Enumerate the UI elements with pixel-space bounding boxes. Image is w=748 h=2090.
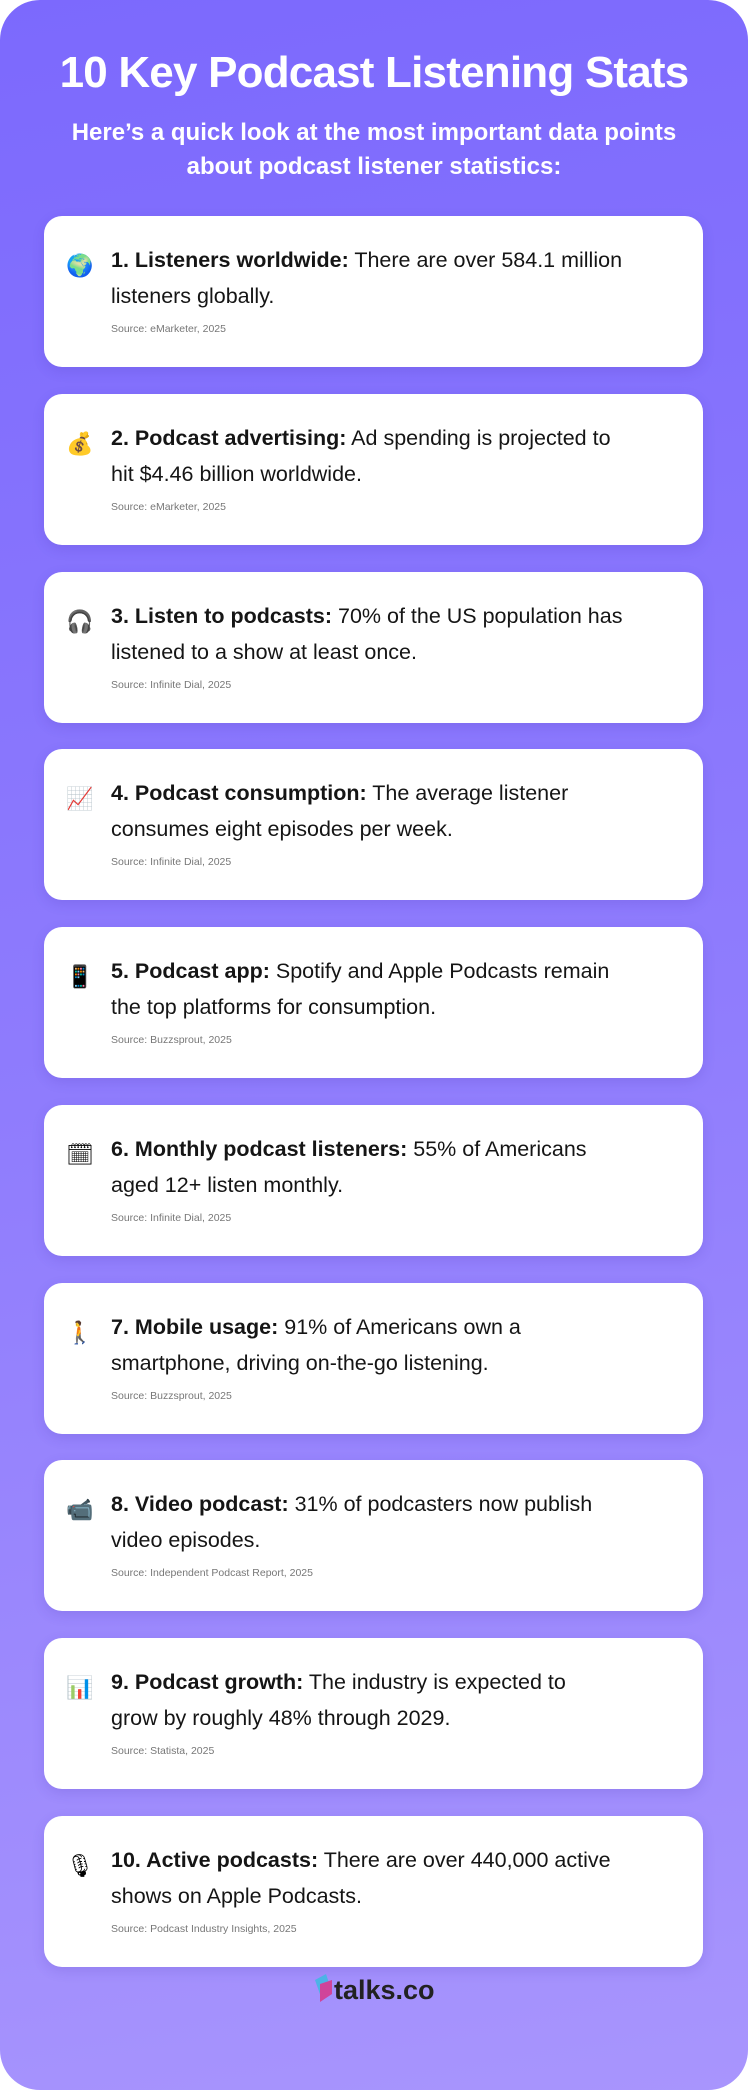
card 10: 10. Active podcasts: There are over 440,000 active xyxy=(111,1848,611,1872)
card 2: 2. Podcast advertising: Ad spending is projected to xyxy=(111,426,611,450)
card 6 xyxy=(44,1105,703,1256)
card 8: Source: Independent Podcast Report, 2025 xyxy=(111,1567,313,1579)
card 1 xyxy=(44,216,703,367)
card 4 xyxy=(44,749,703,900)
card 7: Source: Buzzsprout, 2025 xyxy=(111,1390,232,1402)
card 4: consumes eight episodes per week. xyxy=(111,817,453,841)
card 5: Source: Buzzsprout, 2025 xyxy=(111,1034,232,1046)
card 6: 6. Monthly podcast listeners: 55% of Americans xyxy=(111,1137,587,1161)
card 5 xyxy=(44,927,703,1078)
card 2: Source: eMarketer, 2025 xyxy=(111,501,226,513)
logo: talks.co: talks.co xyxy=(334,1975,435,2005)
card 1: 1. Listeners worldwide: There are over 584.1 million xyxy=(111,248,622,272)
card 9: Source: Statista, 2025 xyxy=(111,1745,214,1757)
card 3: 3. Listen to podcasts: 70% of the US population has xyxy=(111,604,622,628)
card 7: 7. Mobile usage: 91% of Americans own a xyxy=(111,1315,521,1339)
card 7: 🚶 xyxy=(66,1321,94,1346)
subtitle: Here’s a quick look at the most important data points xyxy=(72,119,676,146)
card 9: 9. Podcast growth: The industry is expected to xyxy=(111,1670,566,1694)
card 3 xyxy=(44,572,703,723)
card 1: Source: eMarketer, 2025 xyxy=(111,323,226,335)
card 1: listeners globally. xyxy=(111,284,274,308)
card 10: shows on Apple Podcasts. xyxy=(111,1884,362,1908)
card 4: 📈 xyxy=(66,787,94,812)
card 1: 🌍 xyxy=(66,254,94,279)
card 3: Source: Infinite Dial, 2025 xyxy=(111,679,231,691)
title: 10 Key Podcast Listening Stats xyxy=(60,48,688,97)
card 10: Source: Podcast Industry Insights, 2025 xyxy=(111,1923,297,1935)
card 5: 📱 xyxy=(66,965,94,990)
card 10 xyxy=(44,1816,703,1967)
subtitle: about podcast listener statistics: xyxy=(187,153,561,180)
card 9: 📊 xyxy=(66,1676,94,1701)
card 9 xyxy=(44,1638,703,1789)
card 3: listened to a show at least once. xyxy=(111,640,417,664)
card 8: 📹 xyxy=(66,1498,94,1523)
card 3: 🎧 xyxy=(66,610,94,635)
card 6: Source: Infinite Dial, 2025 xyxy=(111,1212,231,1224)
card 10: 🎙 xyxy=(66,1854,94,1879)
card 4: 4. Podcast consumption: The average listener xyxy=(111,781,568,805)
card 9: grow by roughly 48% through 2029. xyxy=(111,1706,450,1730)
card 7: smartphone, driving on-the-go listening. xyxy=(111,1351,489,1375)
card 2: 💰 xyxy=(66,432,94,457)
card 6: aged 12+ listen monthly. xyxy=(111,1173,343,1197)
subtitle xyxy=(72,119,676,180)
card 5: the top platforms for consumption. xyxy=(111,995,436,1019)
card 2: hit $4.46 billion worldwide. xyxy=(111,462,362,486)
card 5: 5. Podcast app: Spotify and Apple Podcasts remain xyxy=(111,959,609,983)
card 7 xyxy=(44,1283,703,1434)
card 2 xyxy=(44,394,703,545)
card 8: video episodes. xyxy=(111,1528,260,1552)
card 4: Source: Infinite Dial, 2025 xyxy=(111,856,231,868)
card 8 xyxy=(44,1460,703,1611)
card 6: 🗓 xyxy=(66,1143,94,1168)
card 8: 8. Video podcast: 31% of podcasters now publish xyxy=(111,1492,592,1516)
